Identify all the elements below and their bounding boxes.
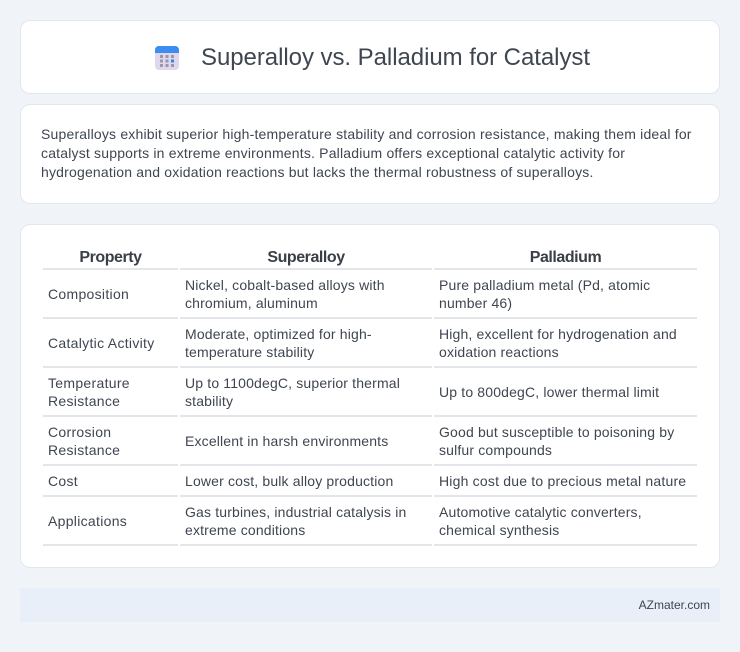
row: catalytic activity: Catalytic Activity: [48, 335, 155, 351]
row: temperature resistance: Up to 800degC, lower thermal limit: [439, 384, 659, 400]
summary text: catalyst supports in extreme environments. Palladium offers exceptional catalytic activity for: [41, 145, 625, 161]
summary text: [41, 126, 692, 180]
row: applications: Automotive catalytic converters,: [439, 504, 642, 520]
row: composition: number 46): [439, 295, 512, 311]
table header: [79, 249, 601, 266]
row: temperature resistance: Resistance: [48, 393, 120, 409]
row: composition: Pure palladium metal (Pd, atomic: [439, 277, 650, 293]
row: cost: Cost: [48, 473, 78, 489]
row: catalytic activity: Moderate, optimized for high-: [185, 326, 372, 342]
title: Superalloy vs. Palladium for Catalyst: [201, 44, 590, 71]
row: applications: Gas turbines, industrial catalysis in: [185, 504, 406, 520]
row: catalytic activity: High, excellent for hydrogenation and: [439, 326, 677, 342]
row: composition: Composition: [48, 286, 129, 302]
row: applications: [48, 504, 642, 538]
row: catalytic activity: oxidation reactions: [439, 344, 559, 360]
footer bar: [20, 588, 720, 622]
row: composition: chromium, aluminum: [185, 295, 318, 311]
row: cost: [48, 473, 686, 489]
row: corrosion resistance: sulfur compounds: [439, 442, 552, 458]
footer credit: AZmater.com: [639, 598, 710, 612]
row: applications: Applications: [48, 513, 127, 529]
panel: summary card: [20, 104, 720, 204]
row: temperature resistance: Up to 1100degC, superior thermal: [185, 375, 400, 391]
row: composition: Nickel, cobalt-based alloys with: [185, 277, 385, 293]
row: corrosion resistance: Good but susceptible to poisoning by: [439, 424, 674, 440]
row: temperature resistance: stability: [185, 393, 233, 409]
icon: calendar: [155, 46, 179, 70]
row: catalytic activity: temperature stability: [185, 344, 314, 360]
row: corrosion resistance: Excellent in harsh environments: [185, 433, 388, 449]
panel: title card: [20, 20, 720, 94]
table header: Property: [79, 249, 142, 266]
row: temperature resistance: Temperature: [48, 375, 130, 391]
row: catalytic activity: [48, 326, 677, 360]
table header: Palladium: [530, 249, 601, 266]
summary text: Superalloys exhibit superior high-temperature stability and corrosion resistance, making them ideal for: [41, 126, 692, 142]
row: composition: [48, 277, 650, 311]
row: cost: Lower cost, bulk alloy production: [185, 473, 393, 489]
panel: comparison table: [20, 224, 720, 568]
row: corrosion resistance: Resistance: [48, 442, 120, 458]
row: applications: chemical synthesis: [439, 522, 559, 538]
row: applications: extreme conditions: [185, 522, 305, 538]
table header: Superalloy: [267, 249, 345, 266]
row: cost: High cost due to precious metal nature: [439, 473, 686, 489]
row: corrosion resistance: Corrosion: [48, 424, 111, 440]
summary text: hydrogenation and oxidation reactions but lacks the thermal robustness of superalloys.: [41, 164, 594, 180]
row: temperature resistance: [48, 375, 659, 409]
row: corrosion resistance: [48, 424, 674, 458]
